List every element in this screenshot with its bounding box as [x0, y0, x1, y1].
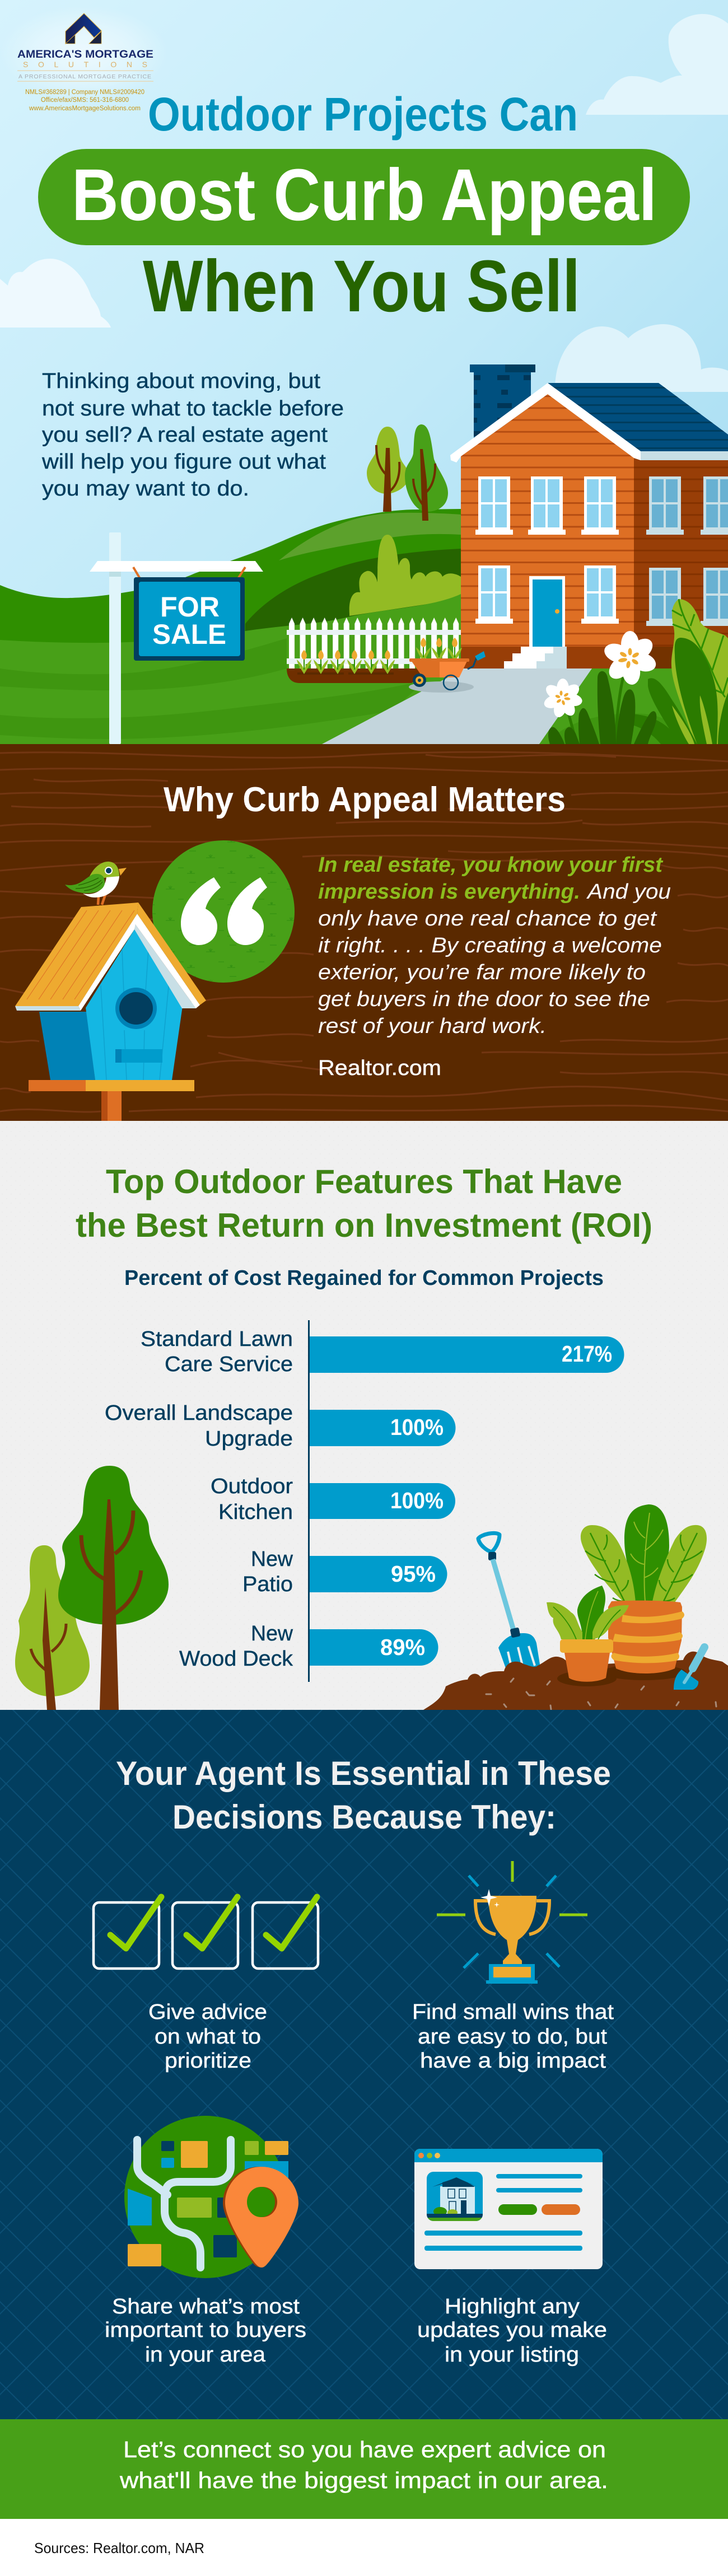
door [529, 576, 565, 647]
panel: call to action [0, 2419, 728, 2519]
bird [65, 862, 127, 905]
flower: small [542, 679, 583, 719]
green quote badge [152, 840, 295, 983]
logo: America's Mortgage Solutions [0, 6, 168, 112]
text: find small wins: are easy to do, but [418, 2025, 607, 2049]
bar: overall landscape upgrade: Overall Landscape [105, 1401, 293, 1425]
panel: hero sky and house scene [0, 0, 728, 744]
bar: overall landscape upgrade [105, 1401, 456, 1451]
garden plants [539, 599, 728, 744]
bar: new patio: New [251, 1548, 293, 1571]
dark leaves [648, 638, 728, 744]
soil mound [423, 1652, 728, 1710]
cloud: top right [586, 14, 728, 115]
bar: standard lawn care service: 217% [562, 1341, 612, 1367]
heading: Why Curb Appeal Matters [164, 780, 566, 819]
house [450, 364, 728, 668]
text: highlight updates: in your listing [445, 2343, 579, 2367]
leaf: left [581, 1525, 636, 1602]
bar: standard lawn care service [141, 1327, 624, 1376]
trowel [674, 1647, 704, 1690]
bar: outdoor kitchen: Outdoor [211, 1475, 293, 1498]
text: find small wins: have a big impact [420, 2049, 606, 2073]
text: find small wins: Find small wins that [412, 2000, 614, 2024]
quote text: And you [586, 880, 671, 904]
bar: overall landscape upgrade: Upgrade [205, 1427, 293, 1451]
wood grain [0, 752, 728, 1112]
bar: new wood deck: 89% [380, 1634, 425, 1660]
tulips [297, 650, 395, 674]
side wall [634, 451, 728, 647]
for sale sign: SALE [152, 619, 226, 650]
bar: overall landscape upgrade: 100% [390, 1414, 444, 1440]
text: give advice: prioritize [165, 2049, 251, 2073]
blue roof [538, 383, 728, 451]
logo: America's Mortgage Solutions: NMLS#368289 | Company NMLS#2009420 [25, 89, 144, 96]
text: give advice: Give advice [148, 2000, 267, 2024]
bar: standard lawn care service: Standard Lawn [141, 1327, 293, 1351]
map pin [223, 2167, 298, 2268]
heading: Decisions Because They: [172, 1798, 556, 1836]
flower stems [568, 672, 624, 744]
tree: lime [367, 427, 409, 512]
large pot [608, 1601, 684, 1673]
panel: call to action: Let’s connect so you have expert advice on [123, 2437, 606, 2462]
text: highlight updates: updates you make [417, 2318, 607, 2342]
bushes [349, 535, 461, 616]
for sale sign: FOR [160, 591, 220, 623]
text: share what's most important: in your area [145, 2343, 266, 2367]
logo mark [66, 13, 101, 44]
large potted plant [581, 1504, 707, 1680]
title line 1: Outdoor Projects Can [148, 88, 578, 141]
logo: America's Mortgage Solutions: www.AmericasMortgageSolutions.com [29, 105, 141, 112]
intro text: will help you figure out what [41, 450, 326, 474]
text: highlight updates [417, 2295, 607, 2367]
chart subtitle: Percent of Cost Regained for Common Projects [124, 1266, 604, 1290]
quote text: get buyers in the door to see the [318, 988, 650, 1011]
panel: why curb appeal matters [0, 744, 728, 1121]
text: give advice: on what to [155, 2025, 261, 2049]
cloud: bottom right [555, 324, 728, 392]
bar chart [105, 1320, 624, 1682]
for sale sign [90, 532, 263, 744]
bar: outdoor kitchen [211, 1475, 455, 1524]
icon: neighborhood map with pin [124, 2116, 298, 2278]
logo: America's Mortgage Solutions: SOLUTIONS [23, 60, 147, 69]
white roof trim [450, 383, 641, 462]
panel: call to action: what'll have the biggest impact in our area. [119, 2467, 608, 2493]
tree: small lime [15, 1545, 90, 1710]
birdhouse [15, 862, 206, 1121]
quote text [318, 853, 671, 1038]
steps [504, 647, 567, 668]
bar: new wood deck [179, 1622, 438, 1671]
intro text [41, 370, 344, 501]
footer: sources [0, 2519, 728, 2576]
bar: new wood deck: Wood Deck [179, 1647, 293, 1671]
leaf: right [652, 1525, 707, 1602]
quote text: impression is everything. [318, 880, 580, 904]
icon: checkboxes [94, 1897, 318, 1969]
cloud: left [0, 259, 111, 328]
text: share what's most important [105, 2295, 306, 2367]
logo: America's Mortgage Solutions: A PROFESSIONAL MORTGAGE PRACTICE [18, 73, 151, 80]
title pill: Boost Curb Appeal [72, 153, 657, 236]
logo: America's Mortgage Solutions: AMERICA'S MORTGAGE [17, 49, 153, 60]
tree: green [405, 424, 448, 521]
mid hill and lawn [0, 594, 461, 744]
text: share what's most important: Share what’s most [112, 2295, 300, 2318]
text: give advice [148, 2000, 267, 2073]
quote text: exterior, you’re far more likely to [318, 961, 646, 984]
bar: new patio [242, 1548, 447, 1596]
leaf: center [624, 1504, 669, 1602]
small potted plant [547, 1586, 629, 1686]
tree: large green [58, 1466, 169, 1710]
grass blades [548, 671, 656, 744]
bar: outdoor kitchen: Kitchen [218, 1500, 293, 1524]
bar: new patio: 95% [391, 1561, 436, 1587]
quote source: Realtor.com [318, 1056, 441, 1080]
text: share what's most important: important to buyers [105, 2318, 306, 2342]
intro text: you may want to do. [42, 477, 249, 501]
fence [287, 618, 461, 668]
wheelbarrow [409, 638, 486, 693]
listing photo [427, 2172, 483, 2221]
hills [0, 509, 461, 744]
chimney [470, 364, 535, 442]
panel: top outdoor features ROI [0, 1121, 728, 1710]
quote text: In real estate, you know your first [318, 853, 663, 877]
heading: the Best Return on Investment (ROI) [76, 1207, 652, 1244]
title line 3: When You Sell [143, 245, 580, 327]
icon: trophy [437, 1861, 587, 1984]
heading [76, 1163, 652, 1244]
panel: your agent is essential [0, 1710, 728, 2419]
bar: new wood deck: New [251, 1622, 293, 1645]
quote text: it right. . . . By creating a welcome [318, 934, 662, 957]
bar: new patio: Patio [242, 1573, 293, 1596]
heading: Top Outdoor Features That Have [106, 1163, 622, 1200]
quote text: rest of your hard work. [318, 1014, 547, 1038]
bar: outdoor kitchen: 100% [390, 1488, 444, 1513]
heading: Your Agent Is Essential in These [116, 1755, 611, 1792]
intro text: not sure what to tackle before [42, 397, 344, 420]
flower bed [287, 650, 431, 683]
windows [475, 476, 728, 626]
walkway [322, 668, 592, 744]
text: find small wins [412, 2000, 614, 2073]
logo: America's Mortgage Solutions: Office/efax/SMS: 561-316-6800 [41, 97, 129, 104]
intro text: Thinking about moving, but [42, 370, 320, 393]
foundation [461, 647, 728, 668]
icon: listing browser window [414, 2149, 603, 2269]
flower: large [601, 631, 659, 685]
quote marks [181, 877, 267, 945]
quote text: only have one real chance to get [318, 907, 657, 931]
bar: standard lawn care service: Care Service [165, 1353, 293, 1376]
heading [116, 1755, 611, 1836]
text: highlight updates: Highlight any [445, 2295, 580, 2318]
footer: sources: Sources: Realtor.com, NAR [34, 2540, 204, 2556]
front wall [461, 392, 634, 647]
garden fork [478, 1533, 541, 1671]
intro text: you sell? A real estate agent [42, 423, 328, 447]
lime leaf [671, 599, 728, 744]
